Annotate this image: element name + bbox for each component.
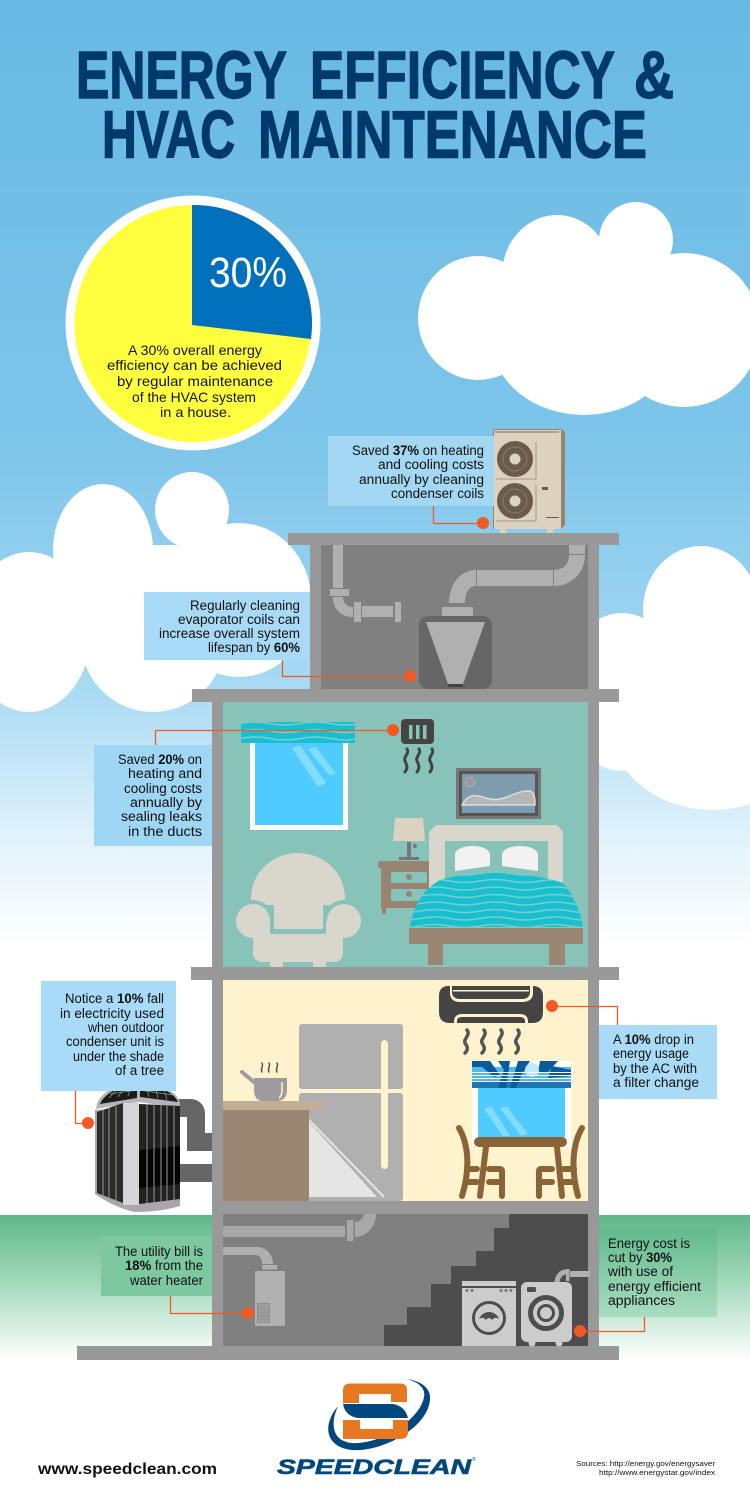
kitchen counter: [223, 1101, 384, 1201]
refrigerator: [299, 1024, 403, 1201]
callout: sealing duct leaks: [94, 724, 399, 846]
callout: evaporator coils: [144, 592, 416, 682]
callout: water heater: water heater: [129, 1273, 203, 1288]
title: [76, 38, 674, 172]
sources: Sources: http://energy.gov/energysaver: [576, 1459, 716, 1468]
website url: www.speedclean.com: [37, 1461, 217, 1478]
basement ductwork: [223, 1214, 376, 1241]
callout: shaded outdoor unit: [41, 981, 176, 1129]
callout: filter change: a filter change: [613, 1075, 699, 1090]
bed: [409, 825, 583, 965]
icon: thermostat: [401, 719, 434, 772]
dining table and chairs: [459, 1128, 582, 1196]
callout: efficient appliances: cut by 30%: [608, 1250, 672, 1265]
picture frame: [456, 768, 541, 819]
callout: efficient appliances: with use of: [607, 1264, 673, 1279]
callout: evaporator coils: lifespan by 60%: [208, 640, 300, 655]
sky background: [0, 0, 750, 1000]
callout: sealing duct leaks: in the ducts: [128, 824, 202, 839]
pie chart: 30 percent: by regular maintenance: [117, 373, 273, 389]
icon: outdoor condenser unit: [95, 1082, 180, 1212]
callout: efficient appliances: Energy cost is: [608, 1236, 690, 1251]
title: EFFICIENCY: [310, 38, 615, 113]
title: ENERGY: [76, 38, 287, 113]
pie chart: 30 percent: in a house.: [160, 404, 231, 420]
callout: efficient appliances: appliances: [608, 1293, 675, 1308]
callout: filter change: energy usage: [613, 1046, 689, 1061]
pie chart: 30 percent: of the HVAC system: [132, 389, 256, 405]
icon: rooftop condenser: [493, 429, 565, 533]
callout: efficient appliances: [574, 1228, 717, 1337]
callout: shaded outdoor unit: condenser unit is: [66, 1034, 164, 1049]
callout: shaded outdoor unit: Notice a 10% fall: [65, 991, 164, 1006]
callout: sealing duct leaks: heating and: [128, 766, 202, 781]
cloud: left: [0, 472, 311, 712]
callout: water heater: [101, 1236, 254, 1319]
sources: http://www.energystar.gov/index: [599, 1468, 715, 1477]
callout: condenser coils: condenser coils: [391, 486, 484, 501]
armchair: [232, 853, 365, 967]
kitchen window: [472, 1061, 571, 1147]
nightstand and lamp: [378, 818, 430, 914]
callout: water heater: 18% from the: [125, 1258, 203, 1273]
pie chart: 30 percent: [66, 196, 320, 450]
callout: condenser coils: and cooling costs: [378, 457, 484, 472]
cloud: right: [562, 545, 750, 810]
logo: Speedclean: SPEEDCLEAN: [277, 1456, 472, 1479]
title: HVAC: [102, 98, 235, 172]
callout: shaded outdoor unit: of a tree: [115, 1063, 164, 1078]
callout: shaded outdoor unit: under the shade: [73, 1049, 164, 1064]
callout: shaded outdoor unit: in electricity used: [60, 1006, 164, 1021]
icon: cooking pot: [242, 1063, 287, 1101]
pie chart: 30 percent: efficiency can be achieved: [107, 357, 282, 373]
icon: wall AC unit: [439, 986, 543, 1053]
callout: evaporator coils: increase overall system: [159, 626, 300, 641]
callout: evaporator coils: evaporator coils can: [178, 612, 300, 627]
icon: washing machine: [462, 1281, 516, 1346]
callout: filter change: A 10% drop in: [613, 1032, 694, 1047]
logo: Speedclean: [277, 1379, 476, 1479]
callout: filter change: by the AC with: [613, 1061, 697, 1076]
logo: Speedclean: ®: [472, 1456, 476, 1463]
bedroom window: [241, 722, 355, 830]
outdoor condenser pipes: [178, 1108, 212, 1173]
house structure: [77, 533, 619, 1360]
callout: evaporator coils: Regularly cleaning: [190, 598, 300, 613]
icon: evaporator unit: [419, 616, 492, 689]
attic ductwork: [330, 545, 585, 622]
pie chart: 30 percent: A 30% overall energy: [128, 342, 262, 358]
callout: filter change: [546, 1000, 717, 1099]
callout: condenser coils: Saved 37% on heating: [352, 443, 484, 458]
sources: [576, 1459, 716, 1477]
callout: shaded outdoor unit: when outdoor: [87, 1020, 164, 1035]
callout: sealing duct leaks: sealing leaks: [121, 809, 202, 824]
pie chart: 30 percent: 30%: [209, 249, 287, 297]
ground: [0, 1215, 750, 1360]
callout: sealing duct leaks: annually by: [130, 795, 202, 810]
callout: efficient appliances: energy efficient: [608, 1279, 701, 1294]
title: &: [634, 38, 674, 113]
callout: sealing duct leaks: Saved 20% on: [118, 752, 202, 767]
staircase: [384, 1214, 588, 1346]
title: MAINTENANCE: [258, 98, 647, 172]
cloud: top right: [418, 202, 750, 415]
callout: condenser coils: annually by cleaning: [359, 472, 484, 487]
callout: water heater: The utility bill is: [115, 1244, 203, 1259]
icon: water heater: [223, 1247, 285, 1326]
callout: condenser coils: [328, 436, 494, 529]
icon: dryer: [521, 1269, 590, 1346]
callout: sealing duct leaks: cooling costs: [124, 781, 202, 796]
